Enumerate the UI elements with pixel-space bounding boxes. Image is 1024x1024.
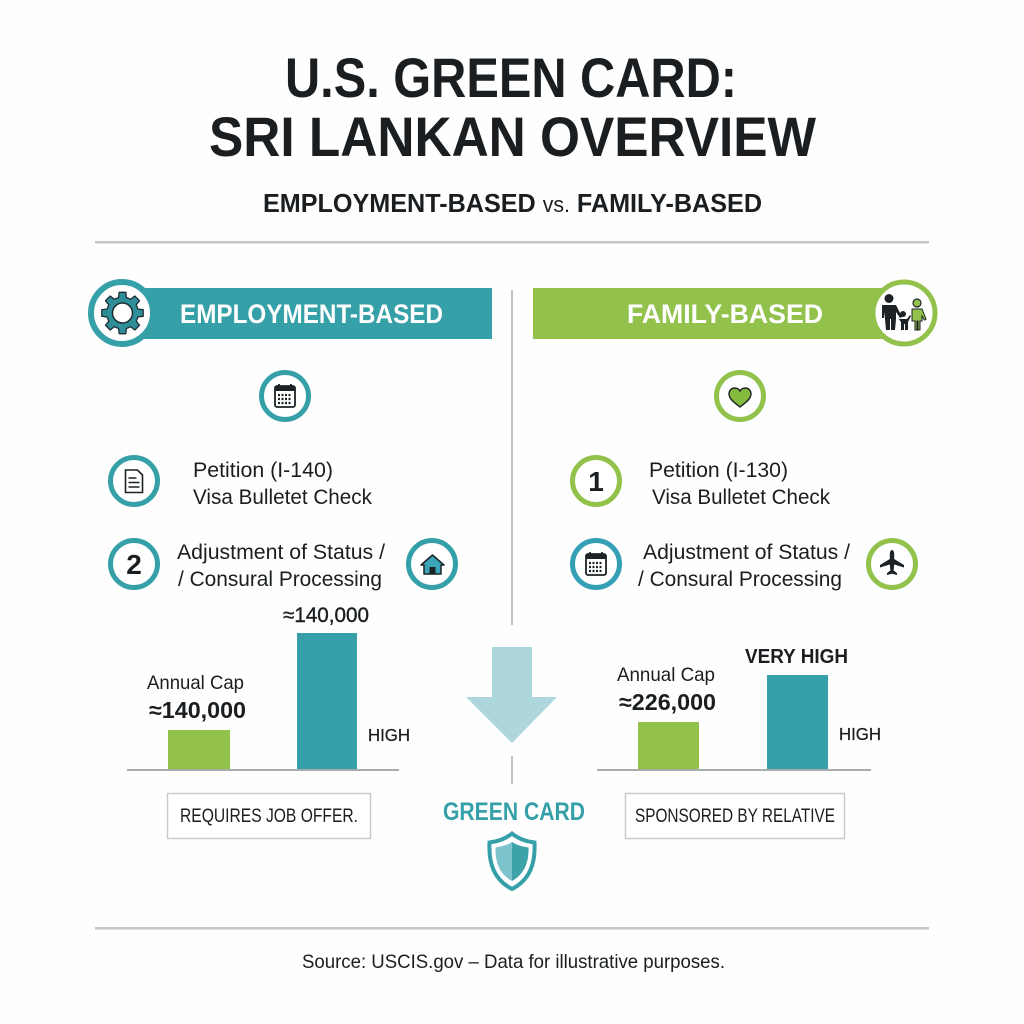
title: U.S. GREEN CARD: — [285, 46, 737, 109]
step: petition: Visa Bulletet Check — [652, 486, 830, 509]
green card label: GREEN CARD — [443, 798, 585, 826]
step: petition: Petition (I-130) — [649, 459, 788, 482]
icon: house — [408, 540, 456, 588]
bar chart: employment: Annual Cap — [147, 672, 244, 694]
icon: number 2: 2 — [126, 549, 142, 580]
icon: family — [882, 294, 926, 330]
bar chart: employment: ≈140,000 — [149, 697, 246, 723]
bar chart: family: Annual Cap — [617, 664, 715, 686]
icon: shield — [489, 834, 535, 889]
step: petition: Visa Bulletet Check — [193, 486, 372, 509]
icon: number 1: 1 — [588, 466, 604, 497]
bar chart: employment: ≈140,000 — [283, 604, 369, 627]
callout: requires job offer: REQUIRES JOB OFFER. — [180, 806, 358, 827]
title — [209, 46, 816, 168]
bar chart: employment — [127, 604, 410, 771]
callout: requires job offer — [168, 794, 370, 838]
bar chart: family: VERY HIGH — [745, 646, 848, 668]
bar chart: employment: HIGH — [368, 725, 410, 745]
step: petition — [572, 458, 830, 509]
icon: number 2 — [110, 540, 158, 588]
callout: sponsored by relative — [626, 794, 844, 838]
source note: Source: USCIS.gov – Data for illustrative purposes. — [302, 951, 725, 973]
icon: number 1 — [572, 458, 620, 504]
step: adjustment of status: Adjustment of Status / — [643, 541, 850, 564]
family banner: FAMILY-BASED — [627, 299, 823, 329]
employment banner: EMPLOYMENT-BASED — [180, 299, 443, 329]
bar chart: family — [597, 646, 881, 771]
icon: plane — [868, 540, 916, 588]
icon: heart — [716, 372, 764, 420]
employment banner — [91, 282, 492, 344]
step: adjustment of status: Adjustment of Status / — [177, 541, 385, 564]
icon: document — [110, 458, 158, 504]
step: adjustment of status: / Consural Processing — [178, 568, 382, 591]
step: adjustment of status: / Consural Processing — [638, 568, 842, 591]
arrow: to green card — [466, 647, 557, 743]
panel: family-based — [533, 282, 935, 838]
bar chart: family: ≈226,000 — [619, 689, 716, 715]
step: petition — [110, 458, 372, 509]
step: adjustment of status — [110, 540, 456, 591]
bar chart: family: HIGH — [839, 724, 881, 744]
step: petition: Petition (I-140) — [193, 459, 333, 482]
family banner — [533, 282, 935, 344]
icon: calendar — [572, 540, 620, 588]
title: SRI LANKAN OVERVIEW — [209, 105, 816, 168]
subtitle: EMPLOYMENT-BASED vs. FAMILY-BASED — [263, 188, 762, 218]
icon: gear — [102, 292, 143, 334]
step: adjustment of status — [572, 540, 916, 591]
panel: employment-based — [91, 282, 492, 838]
callout: sponsored by relative: SPONSORED BY RELATIVE — [635, 806, 835, 827]
icon: calendar — [262, 372, 308, 420]
